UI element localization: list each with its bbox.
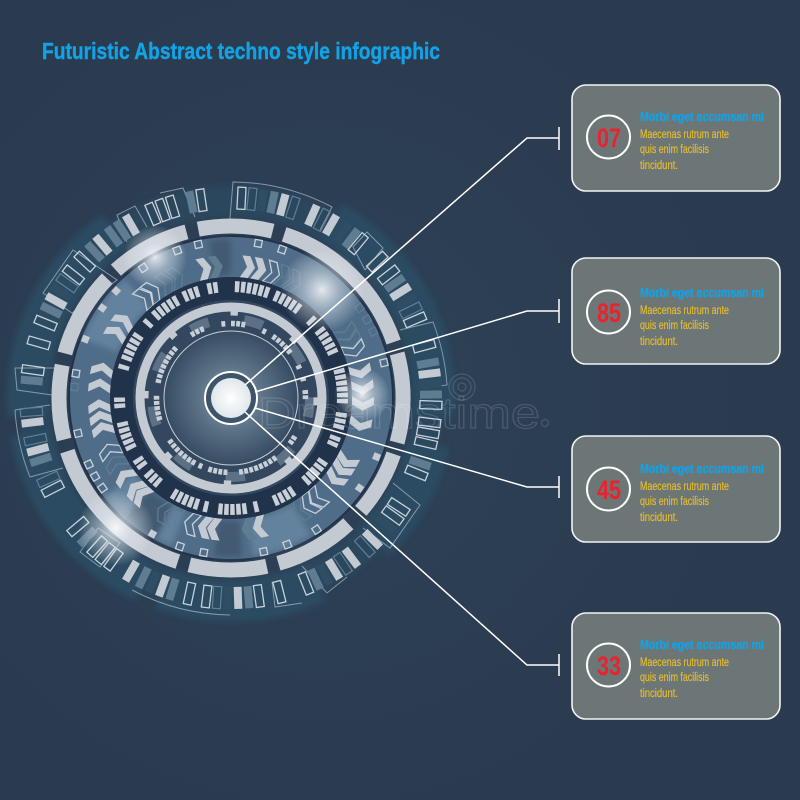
dark tick ring <box>110 277 352 519</box>
panel: 45: Morbi eget accumsan mi <box>640 461 764 476</box>
panel: 07: quis enim facilisis <box>640 144 709 156</box>
chevron band <box>68 235 394 561</box>
outer segmented ring <box>14 181 448 615</box>
panel: 07: tincidunt. <box>640 160 678 172</box>
panel: 33: 33 <box>597 651 621 681</box>
panel: 45: tincidunt. <box>640 512 678 524</box>
gear ring <box>133 300 329 496</box>
panel: 85 <box>572 258 780 364</box>
watermark: Dreamstime <box>258 389 540 438</box>
outer radial tick marks <box>20 187 442 609</box>
panel: 85: Maecenas rutrum ante <box>640 305 729 317</box>
panel: 07: Maecenas rutrum ante <box>640 129 729 141</box>
panel: 07 <box>572 85 780 191</box>
panel: 33: tincidunt. <box>640 688 678 700</box>
inner disc <box>164 331 298 465</box>
glow highlights <box>78 225 390 566</box>
connector line 3 <box>255 408 559 498</box>
teal halo blobs <box>28 195 434 601</box>
panel: 33: Maecenas rutrum ante <box>640 657 729 669</box>
center hub <box>205 372 257 424</box>
small squares around the chevron band <box>71 239 388 557</box>
connector line 4 <box>245 412 559 676</box>
chevrons <box>88 255 374 541</box>
panel: 07: Morbi eget accumsan mi <box>640 109 764 124</box>
panel: 85: 85 <box>597 298 621 328</box>
title: Futuristic Abstract techno style infographic <box>42 38 440 64</box>
outer thin frames <box>15 182 447 615</box>
inner tick ring <box>156 324 306 472</box>
panel: 45: Maecenas rutrum ante <box>640 481 729 493</box>
panel: 85: Morbi eget accumsan mi <box>640 285 764 300</box>
panel: 33: Morbi eget accumsan mi <box>640 637 764 652</box>
panel: 45: 45 <box>597 475 621 505</box>
panel: 45 <box>572 436 780 542</box>
circular techno dial <box>14 181 448 615</box>
panel: 85: quis enim facilisis <box>640 320 709 332</box>
panel: 45: quis enim facilisis <box>640 496 709 508</box>
panel: 07: 07 <box>597 123 621 153</box>
panel: 85: tincidunt. <box>640 336 678 348</box>
connector line 1 <box>245 127 559 385</box>
panel: 33: quis enim facilisis <box>640 672 709 684</box>
panel: 33 <box>572 613 780 719</box>
connector line 2 <box>255 299 559 392</box>
watermark <box>258 374 548 438</box>
